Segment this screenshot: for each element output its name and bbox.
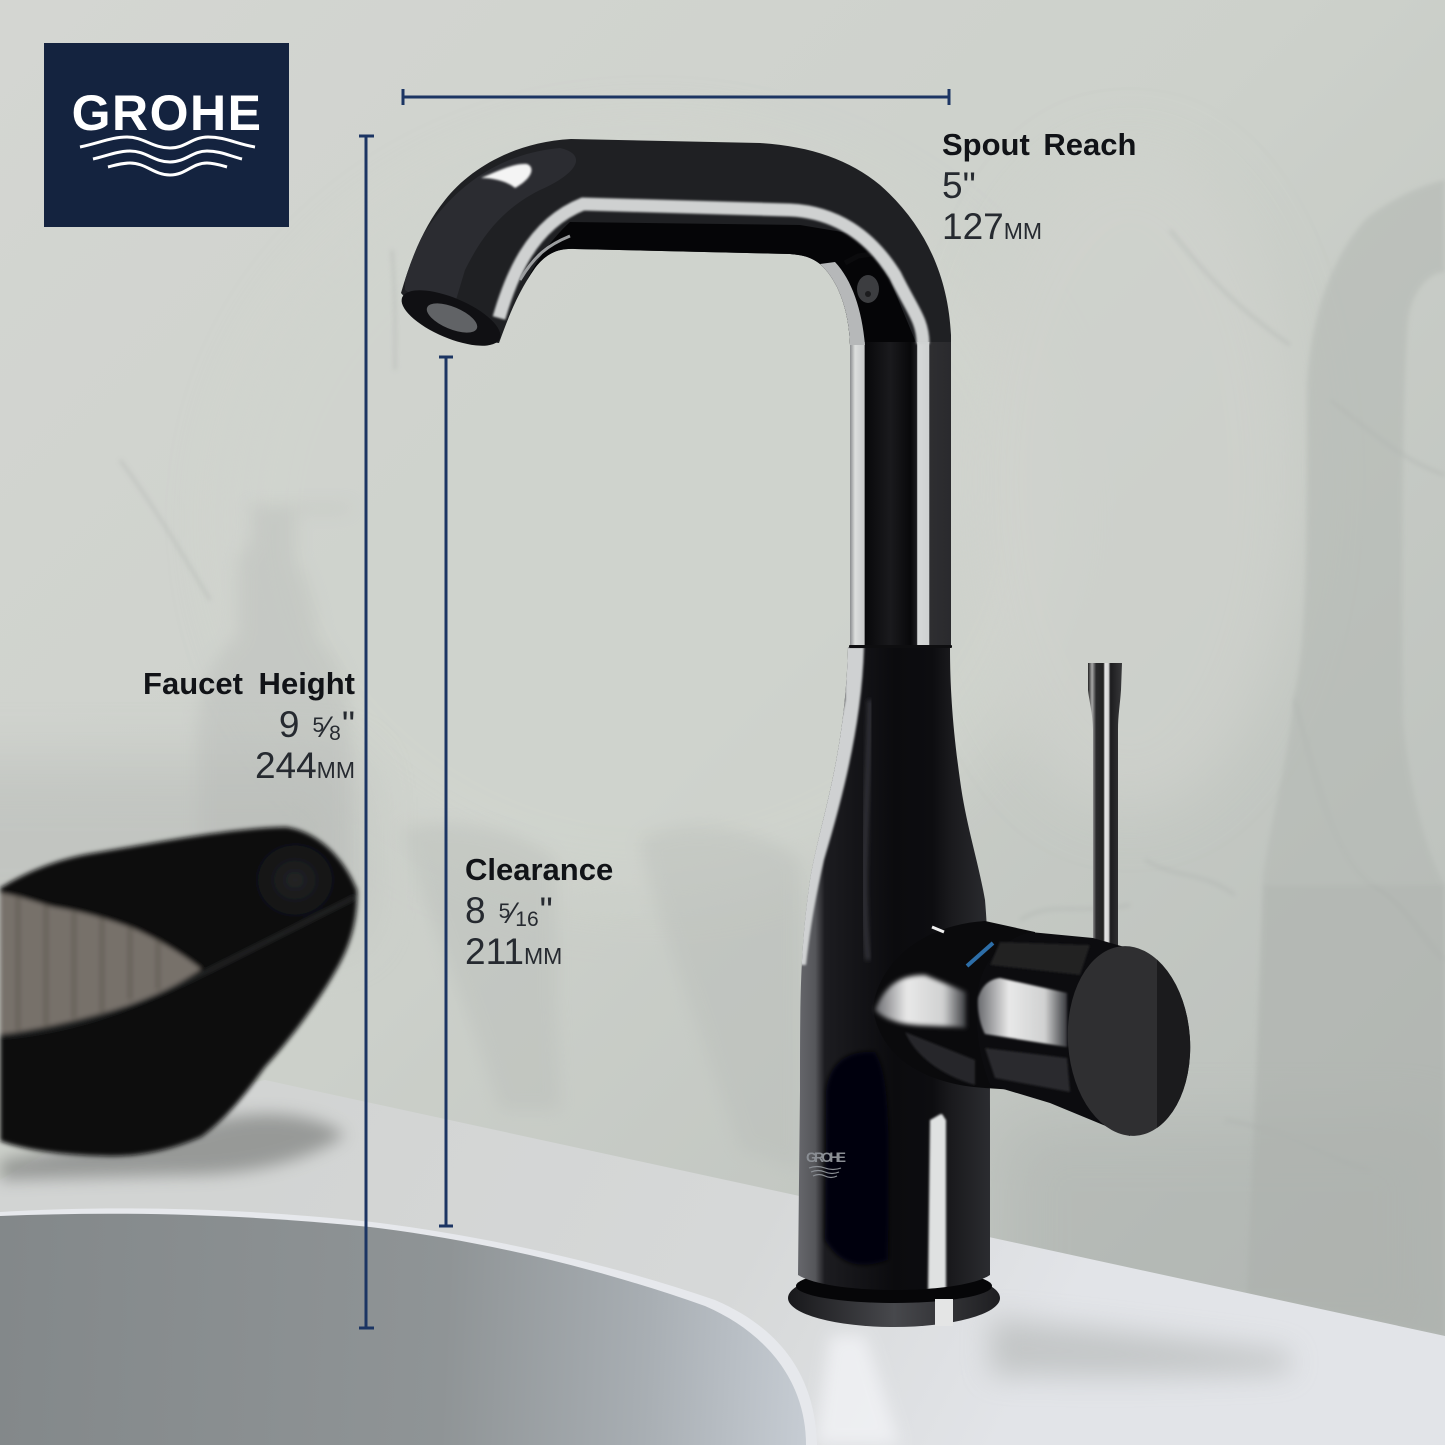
label: faucet height: 244MM [255, 745, 355, 786]
label: spout reach: 127MM [942, 206, 1042, 247]
base flange [788, 1269, 1000, 1327]
faucet height dimension line [359, 136, 374, 1328]
body engraved logo: GROHE [806, 1149, 846, 1165]
label: clearance: 211MM [465, 931, 562, 972]
body engraved logo [806, 1149, 846, 1178]
label: clearance: 8 5⁄16" [465, 890, 553, 931]
label: clearance: Clearance [465, 852, 613, 887]
collar [849, 645, 952, 648]
spout reach dimension line [403, 89, 949, 105]
bowl shadow on counter [0, 1114, 345, 1180]
label: spout reach: Spout Reach [942, 127, 1136, 162]
label: spout reach [942, 127, 1136, 247]
handle [873, 921, 1197, 1150]
shadow of faucet spout arch on wall [1247, 180, 1445, 1336]
label: spout reach: 5" [942, 165, 976, 206]
dark bowl with brush [0, 827, 357, 1156]
lever [1088, 663, 1122, 950]
countertop [0, 1080, 1445, 1445]
washbasin [0, 1208, 817, 1445]
label: clearance [465, 852, 613, 972]
shadow of faucet on left wall [402, 823, 800, 1170]
label: faucet height [143, 666, 355, 786]
shadow of soap bottle on wall [197, 505, 356, 900]
logo wordmark: GROHE [72, 85, 262, 141]
label: faucet height: Faucet Height [143, 666, 355, 701]
aerator [394, 279, 508, 357]
spout [401, 139, 951, 647]
handle end disc [1068, 946, 1190, 1136]
faucet [394, 139, 1197, 1327]
flange highlight [935, 1299, 953, 1326]
label: faucet height: 9 5⁄8" [279, 704, 355, 745]
clearance dimension line [439, 357, 453, 1226]
brush bristles [0, 893, 201, 1034]
body [798, 647, 990, 1290]
GROHE logo [44, 43, 289, 227]
logo waves [80, 136, 256, 176]
